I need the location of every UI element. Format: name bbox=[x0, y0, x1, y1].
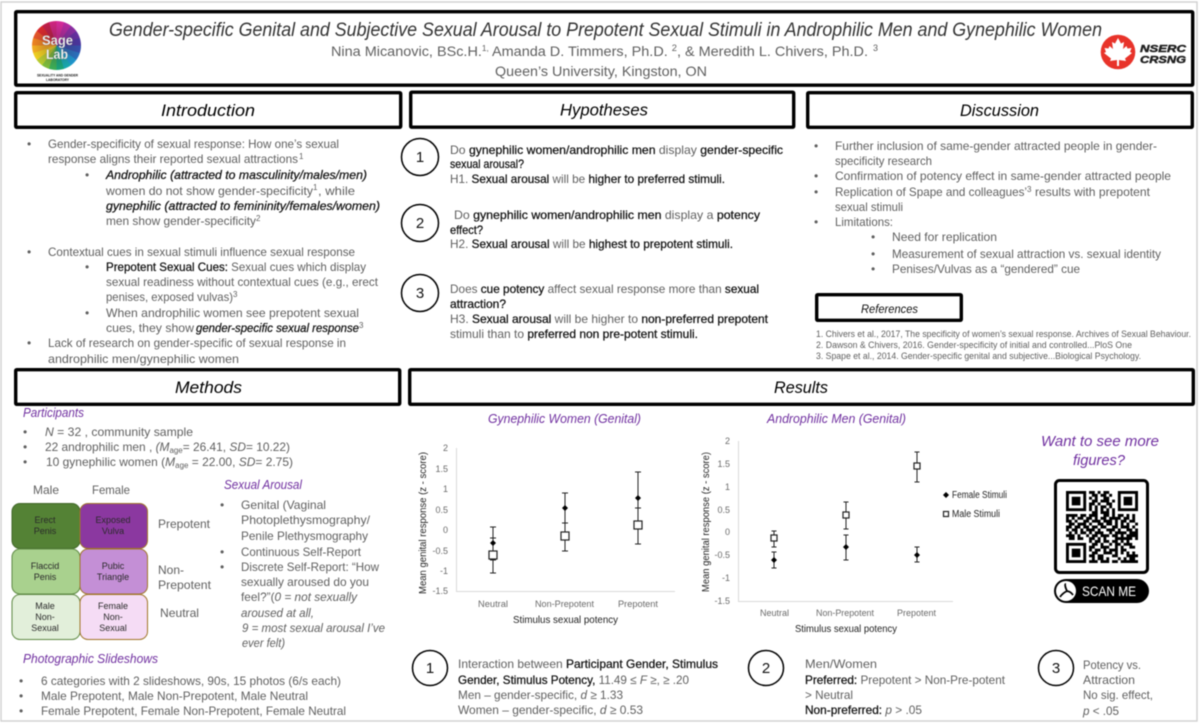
text block: introduction bullets: 3 bbox=[359, 321, 364, 330]
text block: discussion bullets: Further inclusion of same-gender attracted people in gender- bbox=[835, 139, 1157, 153]
heading: References: References bbox=[861, 302, 918, 316]
heading: Hypotheses bbox=[411, 92, 794, 127]
chart: androphilic men genital: Prepotent bbox=[897, 608, 936, 618]
chart: gynephilic women genital: Neutral bbox=[478, 599, 508, 609]
chart: gynephilic women genital bbox=[418, 412, 675, 626]
photographic slideshows: Photographic Slideshows bbox=[23, 652, 158, 666]
text block: discussion bullets: Need for replication bbox=[892, 230, 997, 244]
stimulus category grid: Non- bbox=[158, 563, 184, 577]
text block: discussion bullets: • bbox=[814, 169, 818, 183]
icon: QR code bbox=[1056, 480, 1148, 572]
stimulus category grid: Non- bbox=[103, 612, 123, 622]
text block: discussion bullets: Limitations: bbox=[835, 215, 893, 229]
panel: discussion bbox=[808, 93, 1192, 361]
authors bbox=[331, 43, 878, 59]
result 1: Interaction between Participant Gender, Stimulus bbox=[458, 657, 718, 671]
chart: gynephilic women genital: Mean genital response (z - score) bbox=[418, 452, 429, 594]
text block: introduction bullets: When androphilic women see prepotent sexual bbox=[106, 306, 359, 320]
stimulus category grid: Male bbox=[33, 483, 59, 497]
logo: NSERC CRSNG bbox=[1101, 35, 1187, 69]
text block: introduction bullets: • bbox=[85, 306, 89, 320]
chart: androphilic men genital bbox=[701, 412, 1007, 635]
logo: Sage Lab: Sage bbox=[42, 32, 73, 48]
chart: androphilic men genital: -1 bbox=[722, 573, 730, 583]
text block: introduction bullets: cues, they show bbox=[106, 321, 194, 335]
result 2 bbox=[748, 650, 1006, 717]
stimulus category grid: Prepotent bbox=[158, 517, 211, 531]
chart: androphilic men genital: 2 bbox=[725, 436, 730, 446]
chart: gynephilic women genital: Stimulus sexual potency bbox=[513, 615, 618, 626]
result 1: Women – gender-specific, d ≥ 0.53 bbox=[458, 703, 643, 717]
text block: introduction bullets: Lack of research on gender-specific of sexual response in bbox=[48, 336, 346, 350]
text block: introduction bullets bbox=[27, 137, 380, 366]
text block: references: 3. Spape et al., 2014. Gender-specific genital and subjective...Biological Psychology. bbox=[816, 351, 1141, 361]
heading: Methods: Methods bbox=[175, 378, 243, 397]
logo: Sage Lab: SEXUALITY AND GENDER bbox=[37, 74, 78, 78]
hypothesis 1: 1 bbox=[416, 149, 424, 166]
scan me button: SCAN ME bbox=[1082, 583, 1136, 599]
text block: introduction bullets: gynephilic (attracted to femininity/females/women) bbox=[106, 199, 380, 213]
text block: introduction bullets: gender-specific sexual response bbox=[196, 321, 359, 335]
photographic slideshows: 6 categories with 2 slideshows, 90s, 15 photos (6/s each) bbox=[41, 674, 341, 688]
chart: gynephilic women genital: 1.5 bbox=[435, 464, 448, 474]
hypothesis 3 bbox=[402, 274, 769, 341]
text block: discussion bullets: 3 bbox=[1027, 185, 1032, 194]
participants: SD= 10.22) bbox=[229, 440, 290, 454]
participants: 10 gynephilic women (M bbox=[46, 455, 175, 469]
heading: Methods bbox=[16, 370, 400, 404]
hypothesis 2: Do gynephilic women/androphilic men display a potency bbox=[454, 208, 760, 222]
panel: results bbox=[410, 370, 1193, 718]
result 2: > Neutral bbox=[805, 688, 853, 702]
authors: 2 bbox=[672, 43, 677, 53]
photographic slideshows bbox=[19, 652, 346, 718]
result 3: p < .05 bbox=[1082, 704, 1119, 718]
result 2: Non-preferred: p > .05 bbox=[805, 703, 922, 717]
chart: androphilic men genital: 0 bbox=[725, 527, 730, 537]
result 1: Men – gender-specific, d ≥ 1.33 bbox=[458, 688, 623, 702]
stimulus category grid: Flaccid bbox=[31, 561, 59, 571]
callout: want to see more figures bbox=[1041, 433, 1159, 469]
result 1: Gender, Stimulus Potency, 11.49 ≤ F ≥, ≥ .20 bbox=[458, 673, 689, 687]
sexual arousal measures: Genital (Vaginal bbox=[241, 498, 326, 512]
stimulus category grid: Vulva bbox=[102, 526, 124, 536]
hypothesis 2: 2 bbox=[416, 215, 424, 232]
photographic slideshows: Male Prepotent, Male Non-Prepotent, Male Neutral bbox=[41, 689, 308, 703]
sexual arousal measures: • bbox=[220, 498, 224, 512]
text block: references: 1. Chivers et al., 2017, The specificity of women’s sexual response. Archives of Sexual Behaviour. bbox=[816, 329, 1191, 339]
photographic slideshows: • bbox=[19, 689, 23, 703]
heading: References bbox=[817, 295, 961, 320]
text block: introduction bullets: • bbox=[85, 168, 89, 182]
result 2: Men/Women bbox=[805, 657, 877, 671]
panel: introduction bbox=[16, 93, 401, 366]
chart: androphilic men genital: Mean genital response (z - score) bbox=[701, 452, 712, 592]
chart: gynephilic women genital: 0 bbox=[443, 525, 448, 535]
hypothesis 1: H1. Sexual arousal will be higher to preferred stimuli. bbox=[450, 172, 725, 186]
title: Gender-specific Genital and Subjective Sexual Arousal to Prepotent Sexual Stimuli in Androphilic Men and Gynephilic Women bbox=[109, 20, 1102, 41]
participants: = 26.41, bbox=[183, 440, 229, 454]
hypothesis 2: effect? bbox=[450, 223, 483, 237]
logo: NSERC CRSNG: CRSNG bbox=[1140, 55, 1186, 66]
participants: age bbox=[169, 446, 183, 455]
text block: references bbox=[816, 329, 1191, 361]
participants: Participants bbox=[23, 406, 84, 420]
hypothesis 1: sexual arousal? bbox=[450, 157, 524, 171]
text block: introduction bullets: • bbox=[27, 336, 31, 350]
stimulus category grid: Non- bbox=[35, 612, 55, 622]
text block: discussion bullets: Confirmation of potency effect in same-gender attracted people bbox=[835, 169, 1171, 183]
participants: • bbox=[23, 425, 27, 439]
authors: Amanda D. Timmers, Ph.D. bbox=[489, 43, 672, 59]
chart: androphilic men genital: 0.5 bbox=[717, 505, 730, 515]
authors: 3 bbox=[873, 43, 878, 53]
authors: Nina Micanovic, BSc.H. bbox=[331, 43, 477, 59]
text block: introduction bullets: , while bbox=[318, 184, 355, 198]
text block: introduction bullets: sexual readiness without contextual cues (e.g., erect bbox=[106, 275, 379, 289]
sexual arousal measures: Continuous Self-Report bbox=[241, 545, 362, 559]
result 3: 3 bbox=[1052, 660, 1060, 677]
sexual arousal measures: ever felt) bbox=[242, 636, 285, 650]
text block: discussion bullets: • bbox=[814, 215, 818, 229]
header panel bbox=[16, 12, 1193, 85]
chart legend: Female Stimuli bbox=[952, 490, 1007, 501]
text block: introduction bullets: 2 bbox=[256, 214, 261, 223]
chart: gynephilic women genital: Prepotent bbox=[618, 599, 659, 609]
text block: introduction bullets: • bbox=[27, 245, 31, 259]
sexual arousal measures: • bbox=[220, 560, 224, 574]
heading: Discussion: Discussion bbox=[960, 101, 1039, 120]
hypothesis 1: Do gynephilic women/androphilic men display gender-specific bbox=[450, 143, 783, 157]
text block: introduction bullets: Androphilic (attracted to masculinity/males/men) bbox=[105, 168, 367, 182]
stimulus category grid: Prepotent bbox=[158, 578, 212, 592]
stimulus category grid: Neutral bbox=[160, 606, 199, 620]
text block: discussion bullets: • bbox=[871, 262, 875, 276]
callout: want to see more figures: Want to see more bbox=[1041, 433, 1159, 450]
result 3: Potency vs. bbox=[1083, 658, 1141, 672]
stimulus category grid: Triangle bbox=[97, 572, 129, 582]
photographic slideshows: • bbox=[19, 674, 23, 688]
participants bbox=[23, 406, 293, 470]
sexual arousal measures: feel?”(0 = not sexually bbox=[241, 590, 358, 604]
hypothesis 3: Does cue potency affect sexual response more than sexual bbox=[450, 282, 759, 296]
chart: gynephilic women genital: Non-Prepotent bbox=[535, 599, 594, 609]
chart: androphilic men genital: Stimulus sexual potency bbox=[795, 624, 897, 635]
participants: 22 androphilic men , (M bbox=[45, 440, 170, 454]
chart: androphilic men genital: -1.5 bbox=[714, 596, 730, 606]
chart: androphilic men genital: Non-Prepotent bbox=[816, 608, 874, 618]
stimulus category grid: Sexual bbox=[99, 623, 127, 633]
heading: Hypotheses: Hypotheses bbox=[560, 100, 648, 120]
text block: introduction bullets: 3 bbox=[233, 290, 238, 299]
text block: introduction bullets: women do not show gender-specificity bbox=[105, 184, 313, 198]
sexual arousal measures: aroused at all, bbox=[241, 606, 314, 620]
chart: gynephilic women genital: -0.5 bbox=[432, 546, 448, 556]
text block: discussion bullets bbox=[814, 139, 1171, 276]
heading: Results bbox=[410, 370, 1193, 404]
photographic slideshows: • bbox=[19, 704, 23, 718]
participants: • bbox=[23, 440, 27, 454]
text block: discussion bullets: • bbox=[814, 139, 818, 153]
stimulus category grid: Male bbox=[35, 601, 55, 611]
chart: gynephilic women genital: Gynephilic Women (Genital) bbox=[488, 412, 641, 426]
hypothesis 2: H2. Sexual arousal will be highest to prepotent stimuli. bbox=[450, 237, 733, 251]
text block: discussion bullets: results with prepotent bbox=[1035, 185, 1151, 199]
sexual arousal measures: 9 = most sexual arousal I’ve bbox=[242, 621, 385, 635]
hypothesis 1 bbox=[402, 138, 783, 186]
stimulus category grid: Female bbox=[92, 483, 130, 497]
result 3: No sig. effect, bbox=[1083, 688, 1153, 702]
hypothesis 2 bbox=[402, 204, 760, 251]
scan me button bbox=[1054, 579, 1149, 603]
text block: introduction bullets: • bbox=[27, 137, 31, 151]
chart: androphilic men genital: Androphilic Men (Genital) bbox=[766, 412, 906, 426]
hypothesis 3: 3 bbox=[416, 285, 424, 302]
result 2: Preferred: Prepotent > Non-Pre-potent bbox=[805, 673, 1006, 687]
chart: androphilic men genital: Neutral bbox=[760, 608, 789, 618]
panel: hypotheses bbox=[402, 92, 794, 341]
sexual arousal measures bbox=[220, 478, 385, 650]
text block: discussion bullets: Penises/Vulvas as a “gendered” cue bbox=[892, 262, 1080, 276]
participants: = 22.00, bbox=[188, 455, 239, 469]
authors: , & Meredith L. Chivers, Ph.D. bbox=[677, 43, 868, 59]
text block: discussion bullets: specificity research bbox=[835, 154, 932, 168]
logo: NSERC CRSNG: NSERC bbox=[1140, 44, 1187, 55]
participants: age bbox=[175, 461, 189, 470]
chart: androphilic men genital: 1 bbox=[725, 482, 730, 492]
text block: introduction bullets: penises, exposed vulvas) bbox=[106, 290, 233, 304]
participants: SD= 2.75) bbox=[239, 455, 293, 469]
stimulus category grid: Penis bbox=[34, 526, 57, 536]
result 1: 1 bbox=[426, 660, 434, 677]
sexual arousal measures: • bbox=[220, 545, 224, 559]
text block: introduction bullets: 1 bbox=[299, 152, 304, 161]
sexual arousal measures: sexually aroused do you bbox=[241, 575, 369, 589]
chart: androphilic men genital: -0.5 bbox=[714, 550, 730, 560]
heading: Results: Results bbox=[774, 378, 828, 397]
stimulus category grid bbox=[12, 483, 212, 640]
hypothesis 3: attraction? bbox=[450, 297, 506, 311]
panel: methods bbox=[12, 370, 400, 718]
result 2: 2 bbox=[762, 660, 770, 677]
chart legend: Male Stimuli bbox=[952, 509, 1000, 520]
text block: introduction bullets: men show gender-specificity bbox=[106, 214, 256, 228]
sexual arousal measures: Photoplethysmography/ bbox=[241, 513, 371, 527]
stimulus category grid: Erect bbox=[34, 515, 56, 525]
chart: gynephilic women genital: 0.5 bbox=[435, 505, 448, 515]
chart: gynephilic women genital: -1.5 bbox=[432, 586, 448, 596]
sexual arousal measures: Sexual Arousal bbox=[224, 478, 303, 492]
text block: introduction bullets: • bbox=[85, 260, 89, 274]
heading: Introduction: Introduction bbox=[161, 101, 255, 120]
photographic slideshows: Female Prepotent, Female Non-Prepotent, Female Neutral bbox=[41, 704, 346, 718]
stimulus category grid: Pubic bbox=[102, 561, 125, 571]
chart: gynephilic women genital: 2 bbox=[443, 443, 448, 453]
text block: introduction bullets: Prepotent Sexual Cues: Sexual cues which display bbox=[106, 260, 366, 274]
participants: • bbox=[23, 455, 27, 469]
stimulus category grid: Female bbox=[98, 601, 128, 611]
text block: discussion bullets: Replication of Spape and colleagues’ bbox=[835, 185, 1027, 199]
text block: discussion bullets: Measurement of sexual attraction vs. sexual identity bbox=[892, 247, 1161, 261]
text block: references: 2. Dawson & Chivers, 2016. Gender-specificity of initial and controlled...PloS One bbox=[816, 340, 1132, 350]
stimulus category grid: Sexual bbox=[31, 623, 59, 633]
result 3: Attraction bbox=[1083, 673, 1135, 687]
sexual arousal measures: Discrete Self-Report: “How bbox=[241, 560, 379, 574]
heading: Introduction bbox=[16, 93, 401, 127]
authors: 1, bbox=[482, 44, 489, 53]
hypothesis 3: H3. Sexual arousal will be higher to non-preferred prepotent bbox=[450, 312, 769, 326]
chart: androphilic men genital: 1.5 bbox=[717, 459, 730, 469]
logo: Sage Lab: Lab bbox=[46, 46, 68, 62]
result 3 bbox=[1038, 650, 1153, 718]
text block: introduction bullets: response aligns their reported sexual attractions bbox=[48, 152, 298, 166]
stimulus category grid: Exposed bbox=[95, 515, 131, 525]
text block: introduction bullets: Contextual cues in sexual stimuli influence sexual response bbox=[48, 245, 355, 259]
text block: introduction bullets: Gender-specificity of sexual response: How one’s sexual bbox=[48, 137, 339, 151]
logo: Sage Lab bbox=[32, 21, 82, 82]
text block: discussion bullets: • bbox=[871, 230, 875, 244]
affiliation: Queen’s University, Kingston, ON bbox=[495, 63, 707, 79]
text block: introduction bullets: 1 bbox=[313, 183, 318, 192]
text block: discussion bullets: sexual stimuli bbox=[835, 200, 903, 214]
text block: discussion bullets: • bbox=[814, 185, 818, 199]
logo: Sage Lab: LABORATORY bbox=[46, 78, 70, 82]
text block: introduction bullets: androphilic men/gynephilic women bbox=[48, 352, 239, 366]
participants: N = 32 , community sample bbox=[45, 425, 193, 439]
heading: Discussion bbox=[808, 93, 1192, 127]
chart legend bbox=[943, 490, 1007, 520]
hypothesis 3: stimuli than to preferred non pre-potent stimuli. bbox=[450, 327, 698, 341]
chart: gynephilic women genital: -1 bbox=[440, 566, 448, 576]
result 1 bbox=[412, 650, 718, 717]
text block: discussion bullets: • bbox=[871, 247, 875, 261]
chart: gynephilic women genital: 1 bbox=[443, 484, 448, 494]
sexual arousal measures: Penile Plethysmography bbox=[241, 529, 368, 543]
stimulus category grid: Penis bbox=[34, 572, 57, 582]
callout: want to see more figures: figures? bbox=[1073, 452, 1126, 469]
